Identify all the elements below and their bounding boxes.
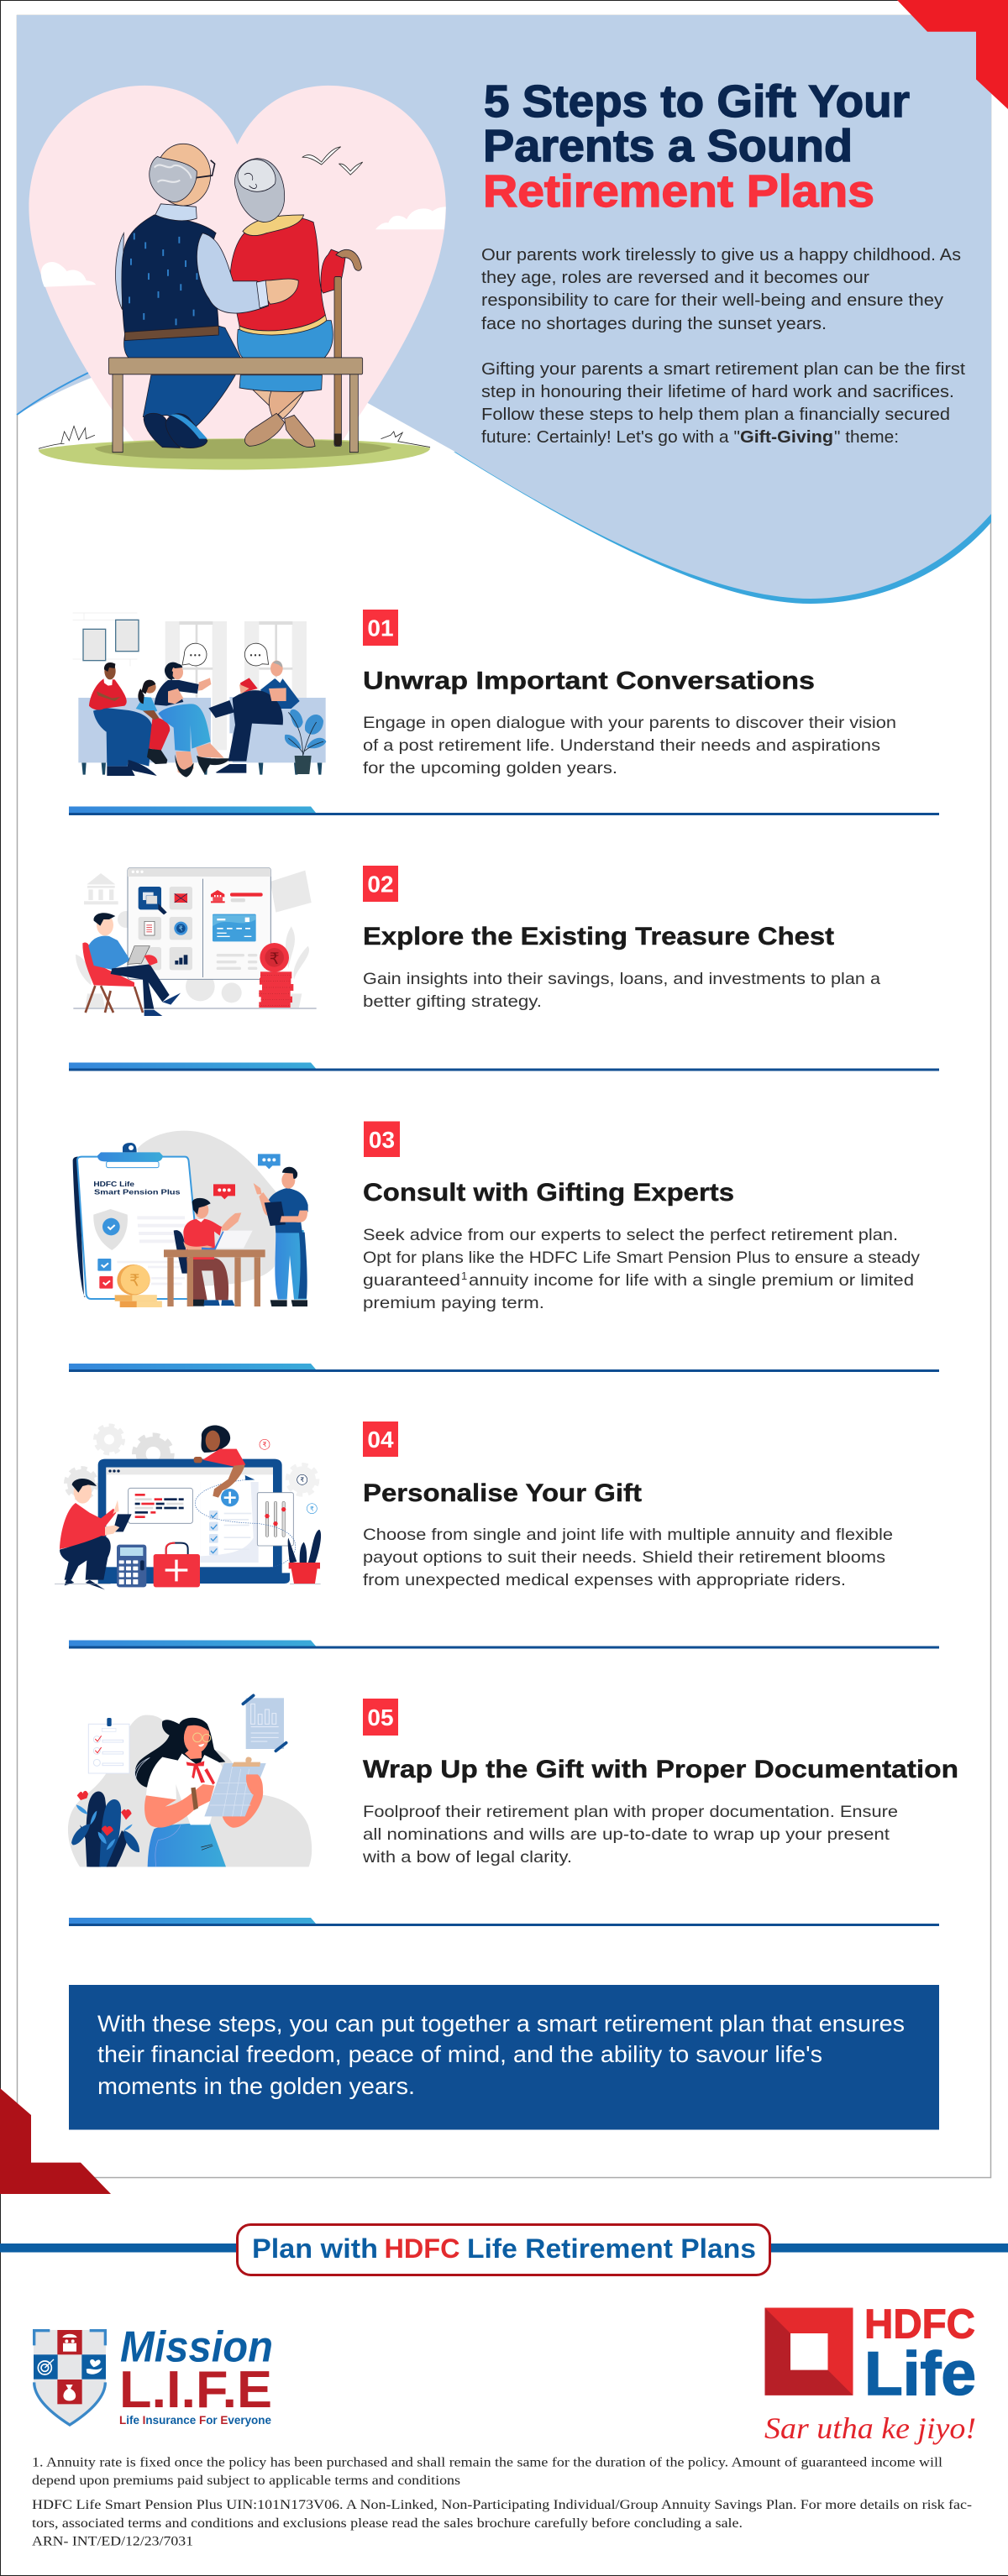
step 1 heading: Unwrap Important Conversations [363, 667, 815, 695]
illustration: personalising a plan on a laptop: ₹ [310, 1505, 314, 1512]
intro paragraph 2: Gifting your parents a smart retirement plan can be the first [481, 360, 965, 379]
step 5 body: Foolproof their retirement plan with proper documentation. Ensure [363, 1803, 898, 1821]
closing callout banner: moments in the golden years. [97, 2073, 415, 2099]
step 4 [55, 1422, 893, 1589]
step number 03: 03 [369, 1127, 395, 1153]
person: crouching man with tablet [60, 1479, 132, 1589]
gears [66, 1426, 318, 1499]
shield [34, 2330, 106, 2426]
step 2 body: Gain insights into their savings, loans, and investments to plan a [363, 970, 880, 988]
step number 01: 01 [367, 615, 394, 641]
footnote and disclaimer: 1. Annuity rate is fixed once the policy has been purchased and shall remain the same for the duration of the policy. Amount of guaranteed income will [32, 2455, 943, 2469]
bench and cane [108, 249, 363, 453]
step 2 body [363, 970, 880, 1011]
illustration: personalising a plan on a laptop: ₹ [300, 1476, 304, 1484]
title: 5 Steps to Gift Your [484, 76, 910, 127]
footnote and disclaimer: depend upon premiums paid subject to applicable terms and conditions [32, 2474, 460, 2488]
person: woman in navy jacket [155, 662, 229, 778]
man [116, 144, 241, 428]
intro paragraph 1: face no shortages during the sunset years. [481, 315, 827, 333]
step 2 [73, 866, 880, 1016]
plant [285, 709, 326, 774]
step 1 body: for the upcoming golden years. [363, 759, 617, 778]
step number 02: 02 [367, 872, 394, 897]
illustration: consulting experts [73, 1131, 308, 1307]
woman [134, 1718, 266, 1867]
illustration: woman with clipboard [68, 1695, 312, 1867]
browser window [128, 868, 270, 979]
step 4 body: from unexpected medical expenses with appropriate riders. [363, 1571, 846, 1589]
title: Retirement Plans [483, 166, 874, 217]
logo: Mission L.I.F.E: Life Insurance For Everyone [119, 2413, 271, 2427]
step 3 body: premium paying term. [363, 1294, 544, 1312]
calculator [117, 1545, 146, 1587]
code card [129, 1488, 192, 1523]
step 1 body: Engage in open dialogue with your parents to discover their vision [363, 714, 896, 732]
clipboard: Smart Pension Plus [94, 1189, 181, 1196]
illustration: financial dashboard [73, 868, 317, 1016]
intro paragraph 2: step in honouring their lifetime of hard work and sacrifices. [481, 383, 954, 401]
person: seated woman [174, 1198, 241, 1306]
illustration: elderly couple on a bench inside a heart [29, 86, 446, 469]
person: girl [136, 680, 170, 764]
footnote and disclaimer [32, 2455, 972, 2549]
intro paragraph 2: Gift-Giving [740, 428, 833, 447]
step 2 body: better gifting strategy. [363, 992, 542, 1011]
pinned chart [243, 1695, 286, 1751]
document [200, 1475, 259, 1563]
step number 04: 04 [367, 1427, 394, 1453]
intro paragraph 2: Follow these steps to help them plan a financially secured [481, 406, 950, 424]
step number 01 [363, 610, 398, 646]
first aid bag [154, 1543, 200, 1587]
footnote and disclaimer: tors, associated terms and conditions and exclusions please read the sales brochure carefully before concluding a sale. [32, 2516, 743, 2531]
step 5 body: with a bow of legal clarity. [362, 1848, 572, 1867]
clipboard: HDFC Life [93, 1181, 135, 1188]
sliders card [257, 1493, 293, 1546]
intro paragraph 1: Our parents work tirelessly to give us a happy childhood. As [481, 246, 961, 264]
coins: ₹ [270, 950, 280, 968]
chat bubbles [213, 1154, 281, 1199]
step 1 [73, 610, 896, 778]
step 5 body: all nominations and wills are up-to-date to wrap up your present [363, 1825, 890, 1844]
step number 05 [363, 1699, 398, 1736]
intro paragraph 2: future: Certainly! Let's go with a " [481, 428, 740, 447]
ground [39, 426, 430, 469]
birds [302, 147, 363, 175]
plan banner: HDFC [385, 2233, 460, 2264]
intro paragraph 2 [481, 360, 965, 447]
logo: Mission L.I.F.E: Mission [120, 2323, 273, 2372]
corner: top right red [897, 0, 1008, 109]
person: man in red sweater [89, 662, 157, 776]
clouds [41, 207, 446, 287]
man's arm around the woman [197, 233, 298, 313]
step 3 body: Seek advice from our experts to select the perfect retirement plan. [363, 1226, 898, 1244]
step 2 heading: Explore the Existing Treasure Chest [363, 923, 834, 950]
illustration: personalising a plan on a laptop [55, 1425, 321, 1589]
step 4 body: Choose from single and joint life with multiple annuity and flexible [363, 1526, 893, 1544]
step 4 heading: Personalise Your Gift [363, 1479, 642, 1507]
step number 04 [363, 1422, 398, 1457]
woman [230, 159, 345, 448]
intro paragraph 1 [481, 246, 961, 333]
step 3 [73, 1122, 920, 1312]
corner: bottom left dark red [0, 2088, 111, 2194]
step 3 body: guaranteed [363, 1271, 460, 1290]
coins [115, 1264, 162, 1307]
plan banner: Life Retirement Plans [467, 2233, 756, 2264]
illustration: personalising a plan on a laptop: ₹ [263, 1441, 267, 1448]
step 5 [68, 1695, 958, 1867]
step 1 body [363, 714, 896, 778]
clipboard [73, 1143, 202, 1299]
intro paragraph 1: they age, roles are reversed and it becomes our [481, 269, 869, 287]
step 5 heading: Wrap Up the Gift with Proper Documentation [363, 1756, 958, 1783]
logo: HDFC Life: Sar utha ke jiyo! [764, 2411, 976, 2445]
coins [259, 943, 293, 1008]
step 3 body: 1 [461, 1270, 467, 1282]
speech bubbles [182, 643, 269, 666]
person: old man with book [208, 661, 300, 773]
cactus pot [288, 1530, 321, 1584]
step 4 body [363, 1526, 893, 1589]
step number 03 [364, 1122, 400, 1157]
plan banner [0, 2225, 1008, 2275]
logo: HDFC Life: Life [864, 2340, 976, 2408]
heart [29, 86, 446, 448]
step 3 body [363, 1226, 920, 1312]
laptop [98, 1459, 290, 1584]
checklist [88, 1718, 129, 1773]
logo: HDFC Life [764, 2302, 976, 2445]
person: standing man [254, 1167, 308, 1306]
person: woman leaning over laptop [194, 1425, 245, 1498]
closing callout banner: their financial freedom, peace of mind, and the ability to savour life's [97, 2041, 822, 2067]
step number 05: 05 [367, 1704, 394, 1730]
logo: Mission L.I.F.E [34, 2323, 273, 2427]
step 5 body [362, 1803, 898, 1867]
closing callout banner: With these steps, you can put together a smart retirement plan that ensures [97, 2010, 905, 2037]
intro paragraph 1: responsibility to care for their well-being and ensure they [481, 291, 943, 310]
step 1 body: of a post retirement life. Understand their needs and aspirations [363, 736, 880, 755]
plant with flowers [71, 1791, 139, 1867]
intro paragraph 2: " theme: [834, 428, 899, 447]
title [483, 76, 910, 217]
desk and laptop [164, 1231, 265, 1306]
step 3 body: Opt for plans like the HDFC Life Smart Pension Plus to ensure a steady [363, 1249, 920, 1267]
step 3 heading: Consult with Gifting Experts [363, 1179, 734, 1207]
title: Parents a Sound [483, 121, 853, 171]
browser window: ₹ [179, 925, 183, 933]
logo: Mission L.I.F.E: L.I.F.E [119, 2361, 272, 2419]
person: man with laptop on chair [82, 913, 181, 1016]
step 4 body: payout options to suit their needs. Shield their retirement blooms [363, 1548, 885, 1567]
footnote and disclaimer: HDFC Life Smart Pension Plus UIN:101N173V06. A Non-Linked, Non-Participating Individual/Group Annuity Savings Plan. For more details on risk fac- [32, 2498, 972, 2512]
step number 02 [363, 866, 398, 902]
hero background panel [17, 15, 991, 604]
closing callout banner [69, 1985, 939, 2129]
illustration: family conversation [73, 613, 326, 778]
coins: ₹ [129, 1271, 139, 1291]
shoes [144, 413, 207, 448]
step 3 body: annuity income for life with a single premium or limited [469, 1271, 914, 1290]
plan banner: Plan with [252, 2233, 378, 2264]
logo: HDFC Life: HDFC [864, 2302, 975, 2348]
footnote and disclaimer: ARN- INT/ED/12/23/7031 [32, 2535, 193, 2549]
